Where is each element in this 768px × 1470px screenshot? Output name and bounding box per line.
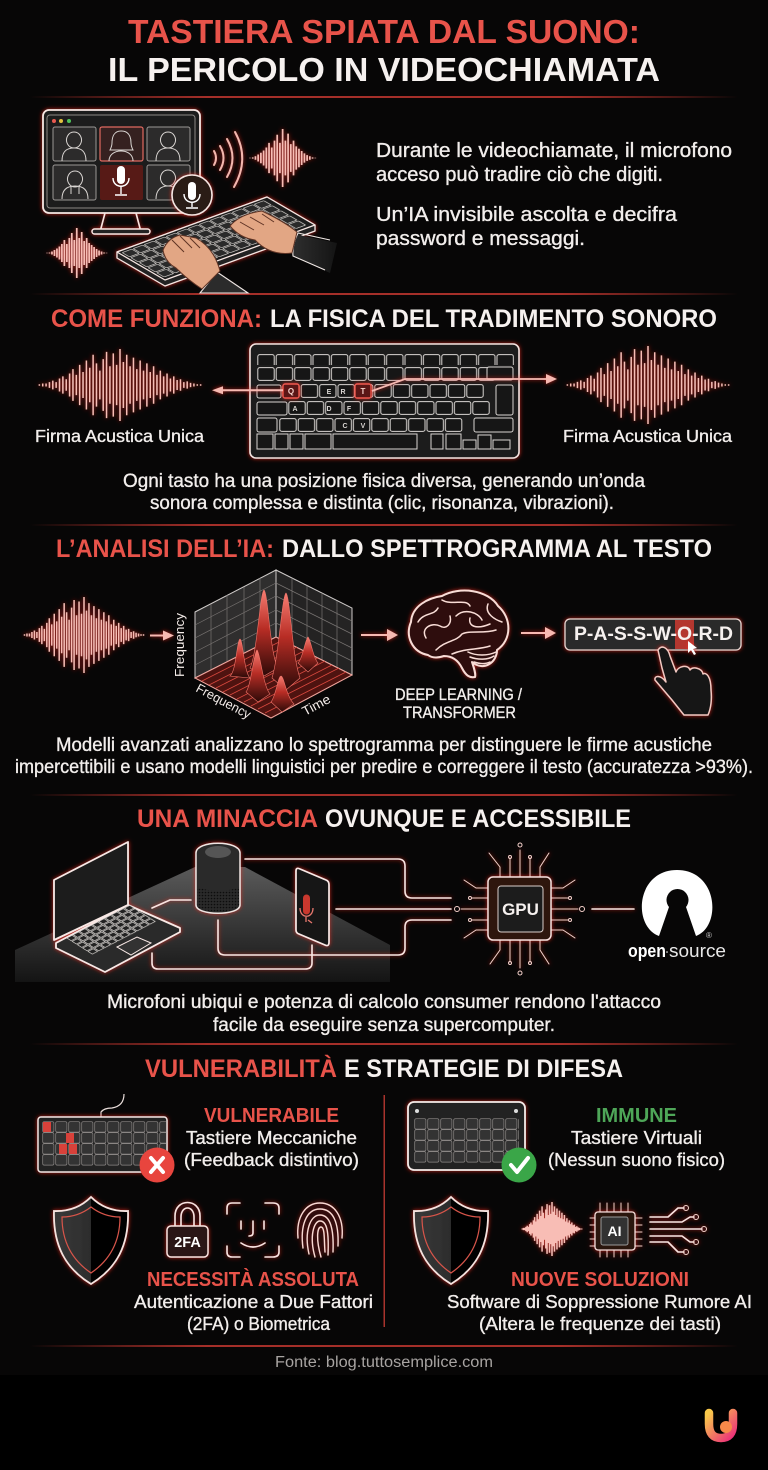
icon: keyboard: A bbox=[292, 406, 298, 413]
text: immune: (Nessun suono fisico) bbox=[548, 1149, 725, 1170]
text: vulnerabile bbox=[184, 1105, 359, 1170]
panel: immune bbox=[408, 1102, 752, 1334]
icon: keyboard: D bbox=[326, 406, 332, 413]
text: minaccia: Microfoni ubiqui e potenza di calcolo consumer rendono l'attacco bbox=[107, 992, 661, 1013]
icon: monitor with video call bbox=[43, 110, 200, 234]
text: vulnerabile: Tastiere Meccaniche bbox=[186, 1127, 357, 1148]
icon: face id bbox=[227, 1203, 279, 1257]
heading: vulnerabilità: VULNERABILITÀ bbox=[145, 1054, 337, 1083]
icon: keyboard and hands bbox=[117, 197, 337, 293]
heading: vulnerabilità bbox=[145, 1054, 623, 1083]
heading: come funziona: COME FUNZIONA: bbox=[51, 305, 262, 333]
arrow: spectrogram to brain bbox=[361, 629, 398, 641]
label: deep learning: DEEP LEARNING / bbox=[395, 686, 522, 704]
connection lines bbox=[152, 859, 451, 969]
logo: open source bbox=[628, 870, 726, 961]
icon: shield bbox=[414, 1197, 488, 1284]
logo: open source: ® bbox=[706, 931, 712, 940]
heading: analisi IA: L’ANALISI DELL’IA: bbox=[56, 535, 274, 563]
icon: sound wave top bbox=[250, 129, 315, 187]
panel: acoustic signature bbox=[35, 344, 732, 458]
logo: brand mark bbox=[709, 1413, 733, 1438]
text: immune bbox=[548, 1105, 725, 1170]
label: firma right: Firma Acustica Unica bbox=[563, 426, 732, 446]
line: gpu to open source bbox=[592, 908, 634, 910]
icon: keyboard: F bbox=[347, 406, 352, 413]
panel: devices bbox=[15, 842, 726, 982]
chart: 3D spectrogram: Time bbox=[299, 691, 333, 719]
heading: minaccia: OVUNQUE E ACCESSIBILE bbox=[325, 805, 631, 833]
label: deep learning bbox=[395, 686, 522, 722]
text: immune: Tastiere Virtuali bbox=[571, 1127, 702, 1148]
text: minaccia: facile da eseguire senza supercomputer. bbox=[213, 1015, 555, 1036]
icon: input wave bbox=[24, 597, 144, 673]
text: necessità bbox=[134, 1268, 373, 1334]
icon: keyboard bbox=[250, 344, 519, 458]
floor shadow bbox=[15, 867, 390, 982]
label: firma left: Firma Acustica Unica bbox=[35, 426, 204, 446]
heading: minaccia bbox=[137, 805, 631, 833]
icon: pointing hand bbox=[655, 641, 711, 715]
icon: 2FA lock bbox=[167, 1202, 208, 1257]
icon: AI chip bbox=[590, 1203, 642, 1257]
text: nuove soluzioni bbox=[447, 1269, 752, 1334]
panel: AI pipeline bbox=[24, 570, 741, 722]
text: vulnerabile: (Feedback distintivo) bbox=[184, 1149, 359, 1170]
icon: shield bbox=[54, 1197, 128, 1284]
password box bbox=[565, 619, 741, 650]
heading: minaccia: UNA MINACCIA bbox=[137, 805, 318, 833]
chart: 3D spectrogram: Frequency bbox=[172, 612, 187, 677]
title: TASTIERA SPIATA DAL SUONO: bbox=[128, 13, 640, 50]
text: nuove soluzioni: (Altera le frequenze dei tasti) bbox=[479, 1313, 721, 1334]
icon: green check bbox=[502, 1148, 536, 1182]
panel: vulnerable bbox=[38, 1094, 373, 1334]
chart: 3D spectrogram: Frequency bbox=[194, 680, 254, 722]
text: analisi bbox=[15, 735, 753, 778]
heading: come funziona: LA FISICA DEL TRADIMENTO SONORO bbox=[270, 305, 717, 333]
icon: fingerprint bbox=[298, 1203, 342, 1257]
source: Fonte: blog.tuttosemplice.com bbox=[275, 1354, 493, 1371]
heading: analisi IA bbox=[56, 535, 712, 563]
icon: sound wave bottom bbox=[47, 228, 107, 278]
heading: vulnerabilità: E STRATEGIE DI DIFESA bbox=[344, 1055, 623, 1083]
intro text: acceso può tradire ciò che digiti. bbox=[376, 164, 663, 186]
heading: come funziona bbox=[51, 305, 717, 333]
text: necessità: Autenticazione a Due Fattori bbox=[134, 1291, 373, 1312]
arrow: wave to spectrogram bbox=[150, 630, 174, 640]
text: nuove soluzioni: Software di Soppressione Rumore AI bbox=[447, 1291, 752, 1312]
icon: GPU chip: GPU bbox=[502, 900, 539, 919]
text: come funziona: Ogni tasto ha una posizione fisica diversa, generando un’onda bbox=[123, 471, 645, 492]
logo: open source: source bbox=[669, 941, 726, 961]
intro text: password e messaggi. bbox=[376, 228, 585, 250]
icon: laptop bbox=[54, 842, 180, 972]
icon: keyboard: V bbox=[361, 423, 366, 430]
text: come funziona: sonora complessa e distinta (clic, risonanza, vibrazioni). bbox=[150, 493, 614, 514]
text: immune: IMMUNE bbox=[596, 1105, 677, 1127]
icon: 2FA lock: 2FA bbox=[174, 1235, 201, 1251]
icon: keyboard: R bbox=[340, 389, 346, 396]
icon: microphone badge bbox=[172, 175, 212, 215]
panel: intro videocall bbox=[43, 110, 337, 293]
icon: virtual keyboard tablet bbox=[408, 1102, 525, 1170]
heading: analisi IA: DALLO SPETTROGRAMMA AL TESTO bbox=[282, 535, 712, 563]
text: vulnerabile: VULNERABILE bbox=[204, 1105, 339, 1127]
intro text: Un’IA invisibile ascolta e decifra bbox=[376, 204, 678, 226]
icon: keyboard: T bbox=[361, 387, 366, 396]
text: minaccia bbox=[107, 992, 661, 1036]
icon: GPU chip bbox=[454, 843, 584, 975]
icon: red cross bbox=[140, 1148, 174, 1182]
icon: smart speaker bbox=[196, 843, 240, 913]
icon: brain bbox=[409, 591, 508, 677]
arrow: to left wave bbox=[212, 386, 283, 394]
label: deep learning: TRANSFORMER bbox=[403, 704, 516, 722]
icon: keyboard: C bbox=[342, 423, 348, 430]
icon: wave left bbox=[39, 349, 201, 421]
icon: circuit traces bbox=[650, 1206, 706, 1254]
icon: noise wave bbox=[522, 1202, 582, 1256]
intro text bbox=[376, 140, 732, 250]
arrow: brain to password bbox=[521, 627, 556, 639]
icon: wave right bbox=[567, 346, 729, 424]
arrow: to right wave bbox=[372, 374, 557, 391]
text: nuove soluzioni: NUOVE SOLUZIONI bbox=[511, 1269, 689, 1291]
text: come funziona bbox=[123, 471, 645, 514]
icon: sound arcs bbox=[214, 132, 242, 187]
icon: AI chip: AI bbox=[608, 1223, 622, 1239]
logo: open source: open bbox=[628, 941, 666, 961]
text: necessità: NECESSITÀ ASSOLUTA bbox=[147, 1268, 359, 1291]
chart: 3D spectrogram bbox=[172, 570, 352, 722]
title: IL PERICOLO IN VIDEOCHIAMATA bbox=[108, 51, 660, 88]
icon: phone bbox=[296, 868, 329, 946]
icon: keyboard: Q bbox=[288, 387, 294, 396]
icon: mechanical keyboard bbox=[38, 1094, 167, 1172]
title bbox=[108, 13, 660, 88]
intro text: Durante le videochiamate, il microfono bbox=[376, 140, 732, 162]
password box: P-A-S-S-W-O-R-D bbox=[574, 624, 733, 645]
text: analisi: Modelli avanzati analizzano lo spettrogramma per distinguere le firme acustiche bbox=[56, 735, 712, 756]
icon: keyboard: E bbox=[327, 389, 332, 396]
text: necessità: (2FA) o Biometrica bbox=[187, 1313, 331, 1334]
